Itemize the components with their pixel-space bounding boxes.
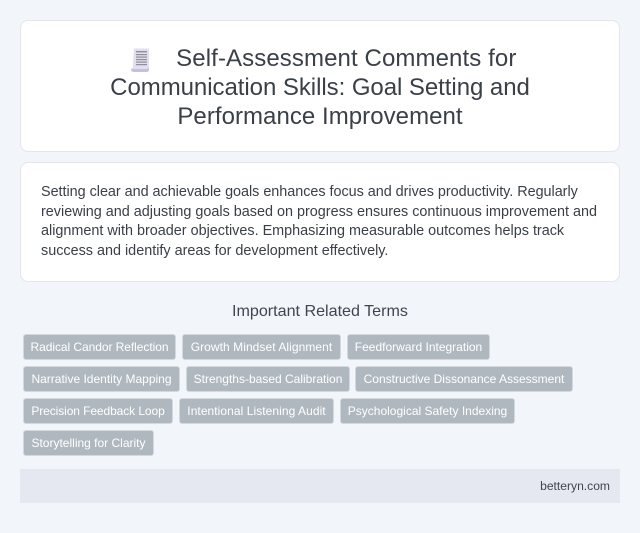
text block: summary: Setting clear and achievable goals enhances focus and drives productivity. Regularly xyxy=(41,184,578,200)
tag xyxy=(23,334,176,360)
panel: title card xyxy=(20,20,620,152)
tag xyxy=(186,366,350,392)
text block: summary: alignment with broader objectives. Emphasizing measurable outcomes helps track xyxy=(41,223,564,239)
text block: summary: reviewing and adjusting goals based on progress ensures continuous improvement and xyxy=(41,204,597,220)
title: Communication Skills: Goal Setting and xyxy=(110,74,530,101)
footer bar xyxy=(20,469,620,503)
tag: Psychological Safety Indexing xyxy=(348,404,507,418)
tag xyxy=(179,398,334,424)
text block: summary: success and identify areas for development effectively. xyxy=(41,242,388,258)
tag xyxy=(23,366,180,392)
footer text: betteryn.com xyxy=(540,479,610,493)
title xyxy=(110,45,530,130)
text block: summary xyxy=(41,184,597,258)
tag xyxy=(355,366,573,392)
heading: related terms: Important Related Terms xyxy=(232,302,408,320)
tag xyxy=(182,334,341,360)
tag list xyxy=(23,334,573,456)
tag: Strengths-based Calibration xyxy=(194,372,342,386)
tag: Precision Feedback Loop xyxy=(31,404,165,418)
panel: summary paragraph xyxy=(20,162,620,282)
tag xyxy=(23,398,173,424)
title: Self-Assessment Comments for xyxy=(176,45,516,72)
tag: Intentional Listening Audit xyxy=(187,404,326,418)
tag xyxy=(347,334,490,360)
tag: Storytelling for Clarity xyxy=(31,436,146,450)
tag: Constructive Dissonance Assessment xyxy=(364,372,564,386)
tag: Feedforward Integration xyxy=(355,340,482,354)
title: Performance Improvement xyxy=(177,103,463,130)
tag xyxy=(23,430,154,456)
tag: Growth Mindset Alignment xyxy=(191,340,332,354)
tag: Narrative Identity Mapping xyxy=(31,372,172,386)
tag: Radical Candor Reflection xyxy=(31,340,168,354)
icon: document scroll xyxy=(131,48,149,72)
tag xyxy=(340,398,515,424)
